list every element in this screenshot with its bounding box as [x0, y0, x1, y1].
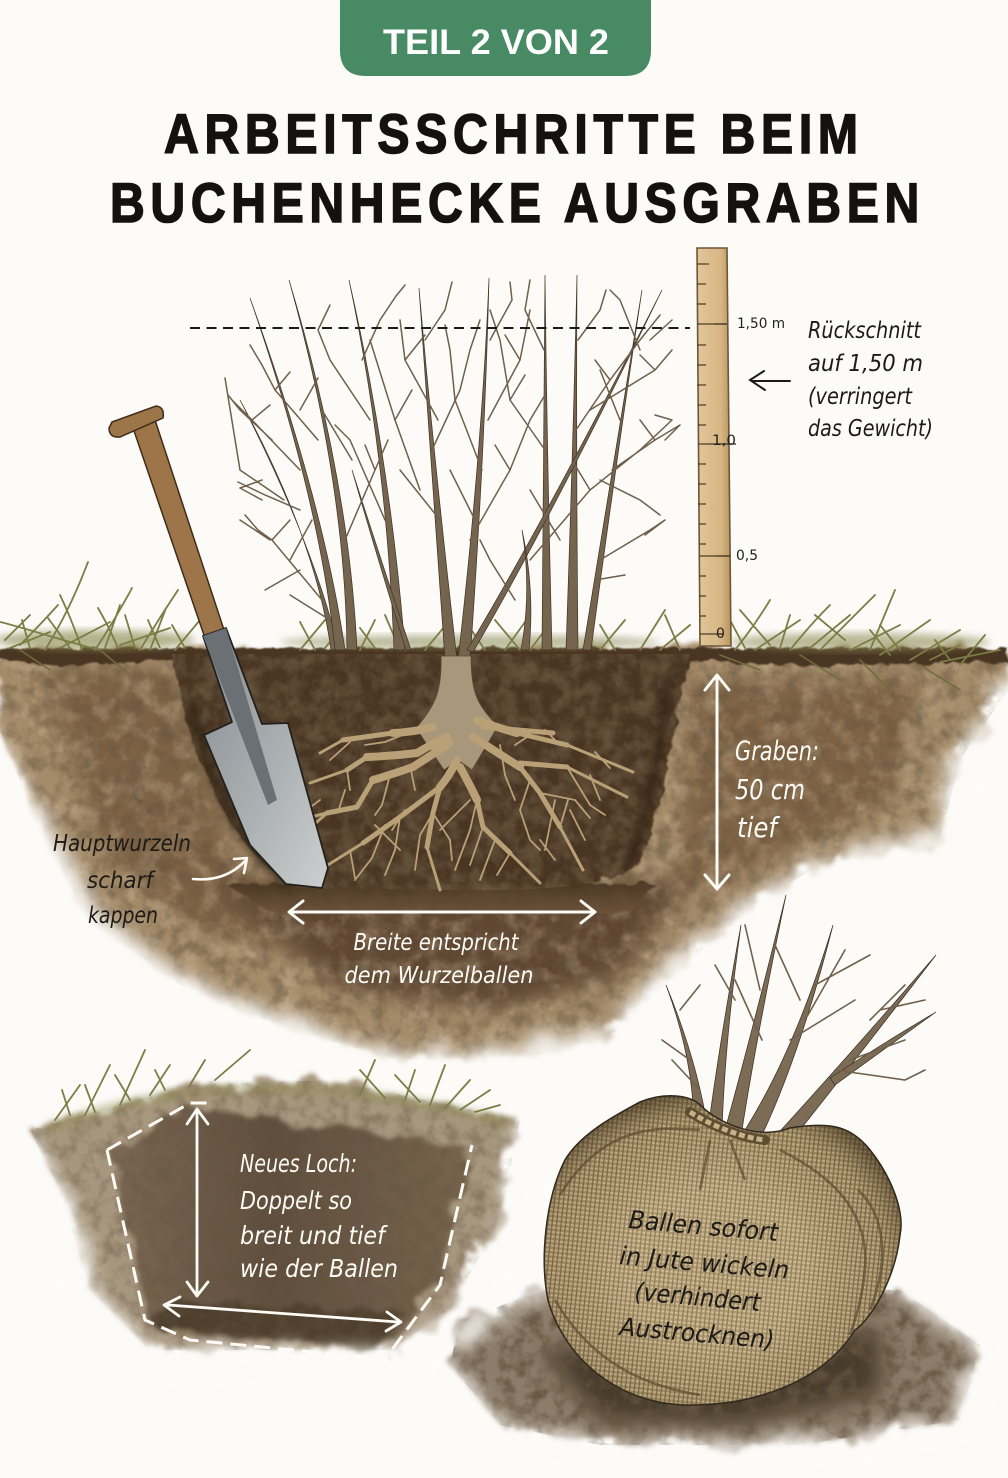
- text: cut back: das Gewicht): [808, 416, 933, 442]
- faded hole edge: [20, 1125, 532, 1362]
- shovel handle: [133, 420, 224, 638]
- faded outer edge of soil: [0, 680, 1008, 1068]
- bale folds and tie: [690, 1112, 765, 1140]
- burlap bale: [544, 1096, 901, 1405]
- text: cut back: Rückschnitt: [808, 318, 922, 344]
- soil mottling: [0, 660, 996, 1052]
- hole mottling: [30, 1080, 520, 1350]
- text: trench depth: tief: [737, 811, 781, 844]
- text: width equals root ball: [344, 930, 534, 989]
- root trunk: [416, 656, 498, 770]
- text: new hole: wie der Ballen: [240, 1254, 398, 1283]
- text: cut main roots: Hauptwurzeln: [53, 831, 191, 857]
- text: cut main roots: kappen: [88, 903, 158, 929]
- measuring stick: 0,5: [736, 548, 758, 564]
- text: cut main roots: [53, 831, 191, 929]
- new hole: [20, 1050, 532, 1362]
- grass on hole edge: [45, 1050, 510, 1130]
- text: wrap in jute: Austrocknen): [617, 1312, 775, 1354]
- measuring stick: 0: [716, 626, 725, 642]
- badge: part 2 of 2: TEIL 2 VON 2: [383, 23, 609, 62]
- ground under bale: [445, 1280, 985, 1452]
- shovel: [109, 406, 328, 888]
- shovel socket and blade: [203, 628, 328, 888]
- text: cut back: [808, 318, 933, 442]
- roots: [273, 656, 633, 890]
- main roots: [367, 720, 520, 800]
- text: width equals root ball: dem Wurzelballen: [344, 963, 534, 989]
- text: trench depth: 50 cm: [735, 773, 805, 806]
- bare hedge stems: [225, 275, 680, 660]
- title: BUCHENHECKE AUSGRABEN: [110, 173, 919, 235]
- trench: [172, 654, 690, 890]
- measuring stick: 1,0: [712, 433, 736, 449]
- bale branches: [662, 895, 936, 1140]
- measuring stick: [697, 248, 785, 646]
- arrow: main roots: [193, 858, 247, 879]
- text: new hole: Neues Loch:: [240, 1149, 357, 1178]
- measuring stick: 1,50 m: [737, 316, 785, 332]
- text: cut back: (verringert: [808, 384, 913, 410]
- hole width arrow: [164, 1297, 401, 1331]
- text: wrap in jute: (verhindert: [633, 1277, 763, 1317]
- text: width equals root ball: Breite entspricht: [354, 930, 519, 956]
- main stems: [240, 275, 662, 660]
- arrow: width: [289, 901, 595, 923]
- text: wrap in jute: [617, 1205, 790, 1354]
- text: trench depth: [735, 736, 819, 844]
- side twigs: [225, 280, 680, 620]
- badge: part 2 of 2: [340, 0, 651, 76]
- dashed hole outline: [107, 1103, 472, 1359]
- grass: [0, 562, 1000, 690]
- soil cross-section: [0, 640, 1008, 1070]
- text: new hole: [240, 1149, 398, 1283]
- text: new hole: Doppelt so: [240, 1186, 352, 1215]
- text: cut main roots: scharf: [87, 868, 156, 894]
- hole depth arrow: [187, 1109, 208, 1296]
- text: cut back: auf 1,50 m: [808, 351, 923, 377]
- dashed cut line at 1.50 m: [190, 327, 690, 329]
- text: trench depth: Graben:: [735, 736, 819, 767]
- bale twigs: [662, 925, 925, 1090]
- arrow: trench depth: [705, 675, 729, 889]
- title: ARBEITSSCHRITTE BEIM: [164, 104, 858, 166]
- text: wrap in jute: in Jute wickeln: [618, 1241, 790, 1285]
- text: wrap in jute: Ballen sofort: [627, 1205, 781, 1247]
- trench mottling: [170, 650, 695, 895]
- title: [110, 104, 919, 235]
- shovel grip: [109, 406, 163, 437]
- text: new hole: breit und tief: [240, 1221, 388, 1250]
- arrow to stick: [750, 371, 790, 390]
